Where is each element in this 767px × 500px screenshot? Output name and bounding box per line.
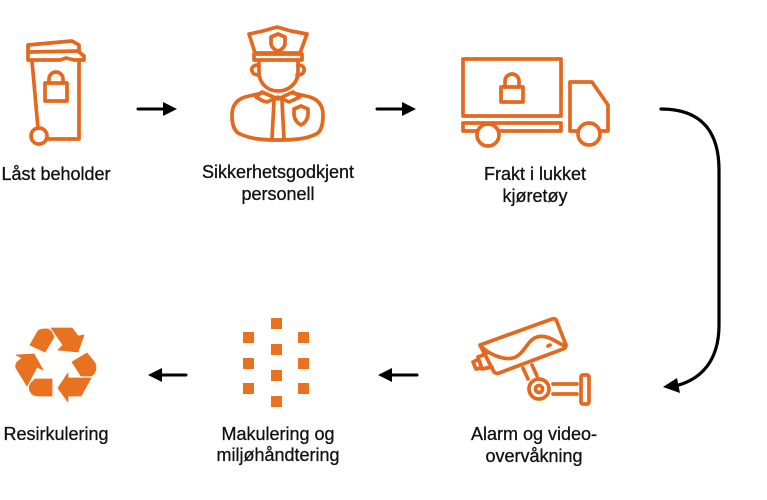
label: locked bin: Låst beholder (1, 164, 111, 184)
label: security-cleared personnel: Sikkerhetsgodkjent (202, 162, 354, 182)
label: shredding and environmental handling line 2: miljøhåndtering (216, 445, 340, 465)
icon: security officer (232, 27, 323, 140)
arrow: curved truck to surveillance (661, 109, 719, 393)
arrow: personnel to truck (377, 102, 416, 116)
icon: recycling symbol (16, 328, 96, 402)
label: security-cleared personnel line 2: personell (241, 184, 315, 204)
arrow: bin to personnel (138, 102, 177, 116)
icon: truck (463, 59, 608, 146)
label: closed vehicle transport line 2: kjøretøy (502, 186, 568, 206)
label: alarm and video surveillance: Alarm og video- (471, 424, 597, 444)
label: shredding and environmental handling: Makulering og (221, 424, 335, 444)
arrow: shredding to recycling (148, 368, 186, 382)
icon: surveillance camera (473, 319, 589, 404)
label: closed vehicle transport: Frakt i lukket (484, 164, 586, 184)
label: recycling: Resirkulering (3, 424, 109, 444)
label: alarm and video surveillance line 2: overvåkning (485, 446, 583, 466)
icon: shredded squares (243, 318, 309, 407)
icon: locked bin (28, 41, 84, 144)
arrow: surveillance to shredding (378, 368, 417, 382)
